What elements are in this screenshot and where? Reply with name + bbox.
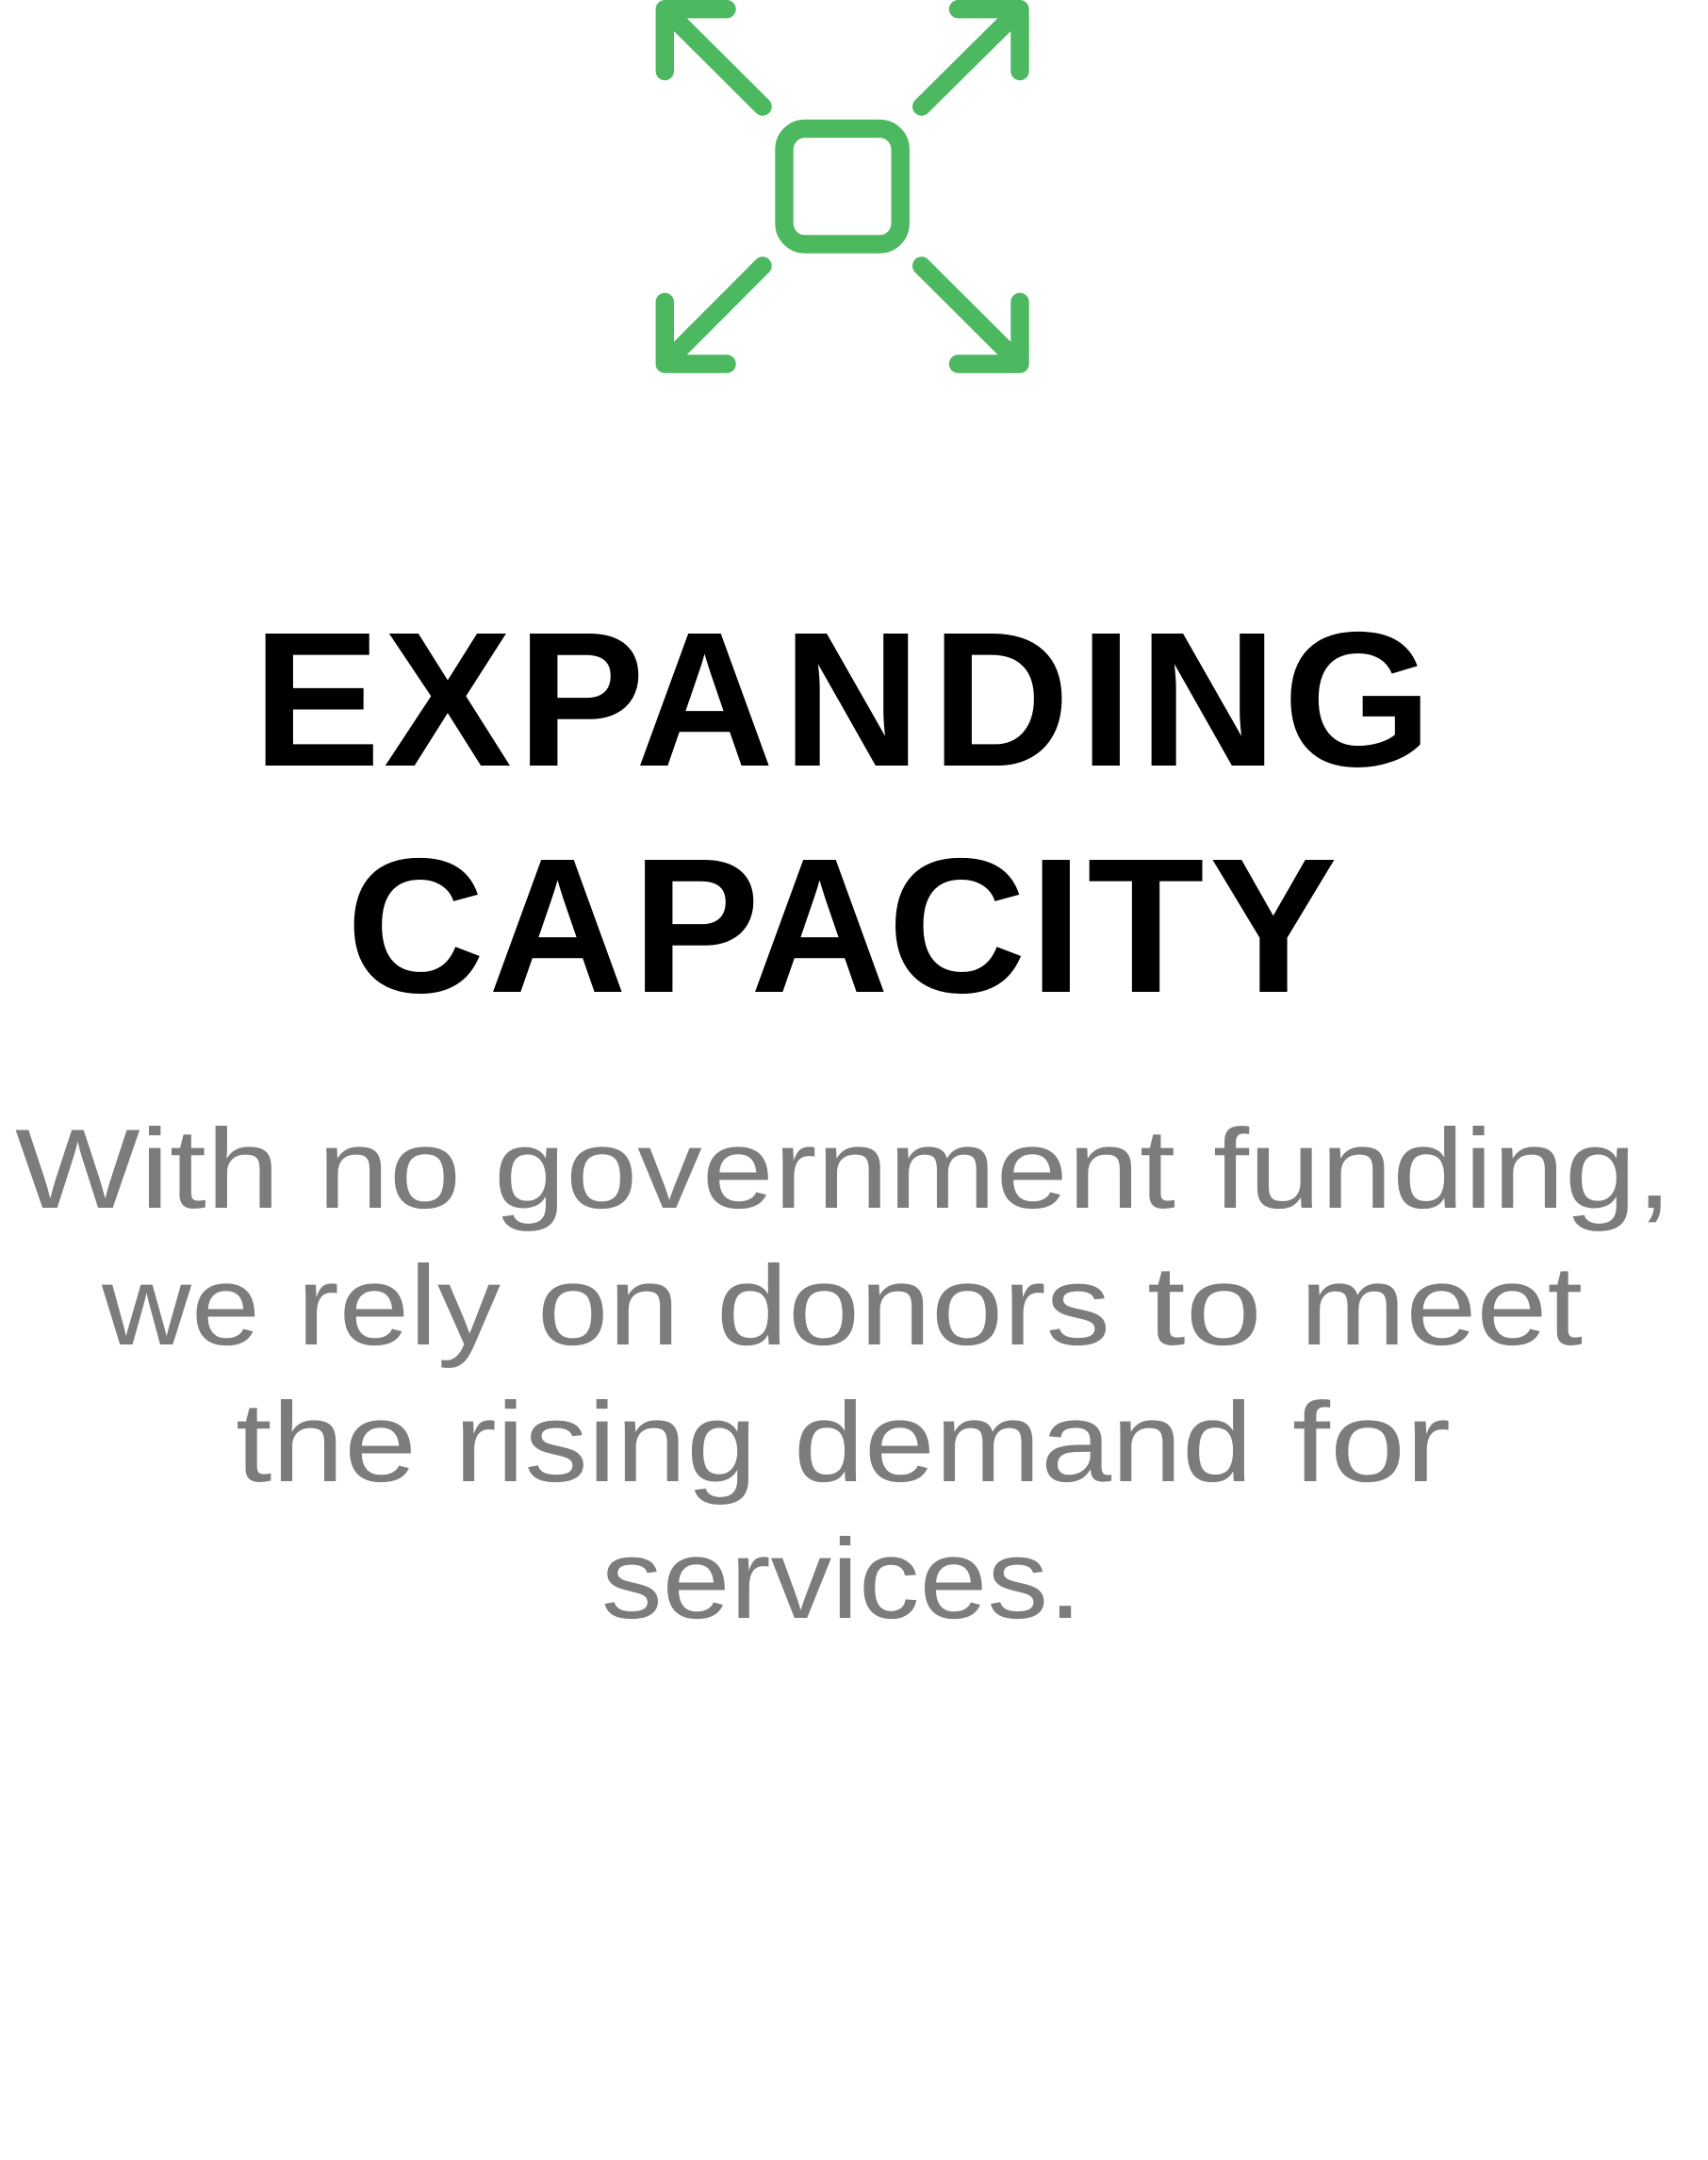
body line 3 <box>236 1379 1451 1506</box>
body line 3: the <box>236 1379 417 1506</box>
body line 3: for <box>1292 1379 1451 1506</box>
body line 3: rising <box>454 1379 757 1506</box>
body line 2: on <box>537 1243 680 1369</box>
title line 1: EXPANDING <box>253 593 1432 807</box>
body line 2: we <box>101 1243 260 1369</box>
body line 2: donors <box>716 1243 1110 1369</box>
title: Expanding Capacity <box>253 593 1432 1033</box>
arrow: bottom left <box>665 266 763 364</box>
body line 1 <box>15 1106 1672 1232</box>
body text block <box>15 1106 1672 1642</box>
body line 2: meet <box>1300 1243 1583 1369</box>
arrow: top right <box>922 9 1020 107</box>
arrow: top left <box>665 9 763 107</box>
body line 1: With <box>15 1106 280 1232</box>
body line 1: funding, <box>1213 1106 1672 1232</box>
body line 1: no <box>318 1106 461 1232</box>
body line 2: rely <box>297 1243 501 1369</box>
body line 3: demand <box>794 1379 1253 1506</box>
body line 4: services. <box>601 1516 1082 1642</box>
icon: square with four arrows expanding outward <box>665 9 1020 364</box>
body line 2: to <box>1147 1243 1262 1369</box>
body line 1: government <box>494 1106 1175 1232</box>
arrow: bottom right <box>922 266 1020 364</box>
body line 2 <box>101 1243 1583 1369</box>
icon: centre rounded square <box>784 128 900 244</box>
title line 2: CAPACITY <box>346 819 1338 1033</box>
